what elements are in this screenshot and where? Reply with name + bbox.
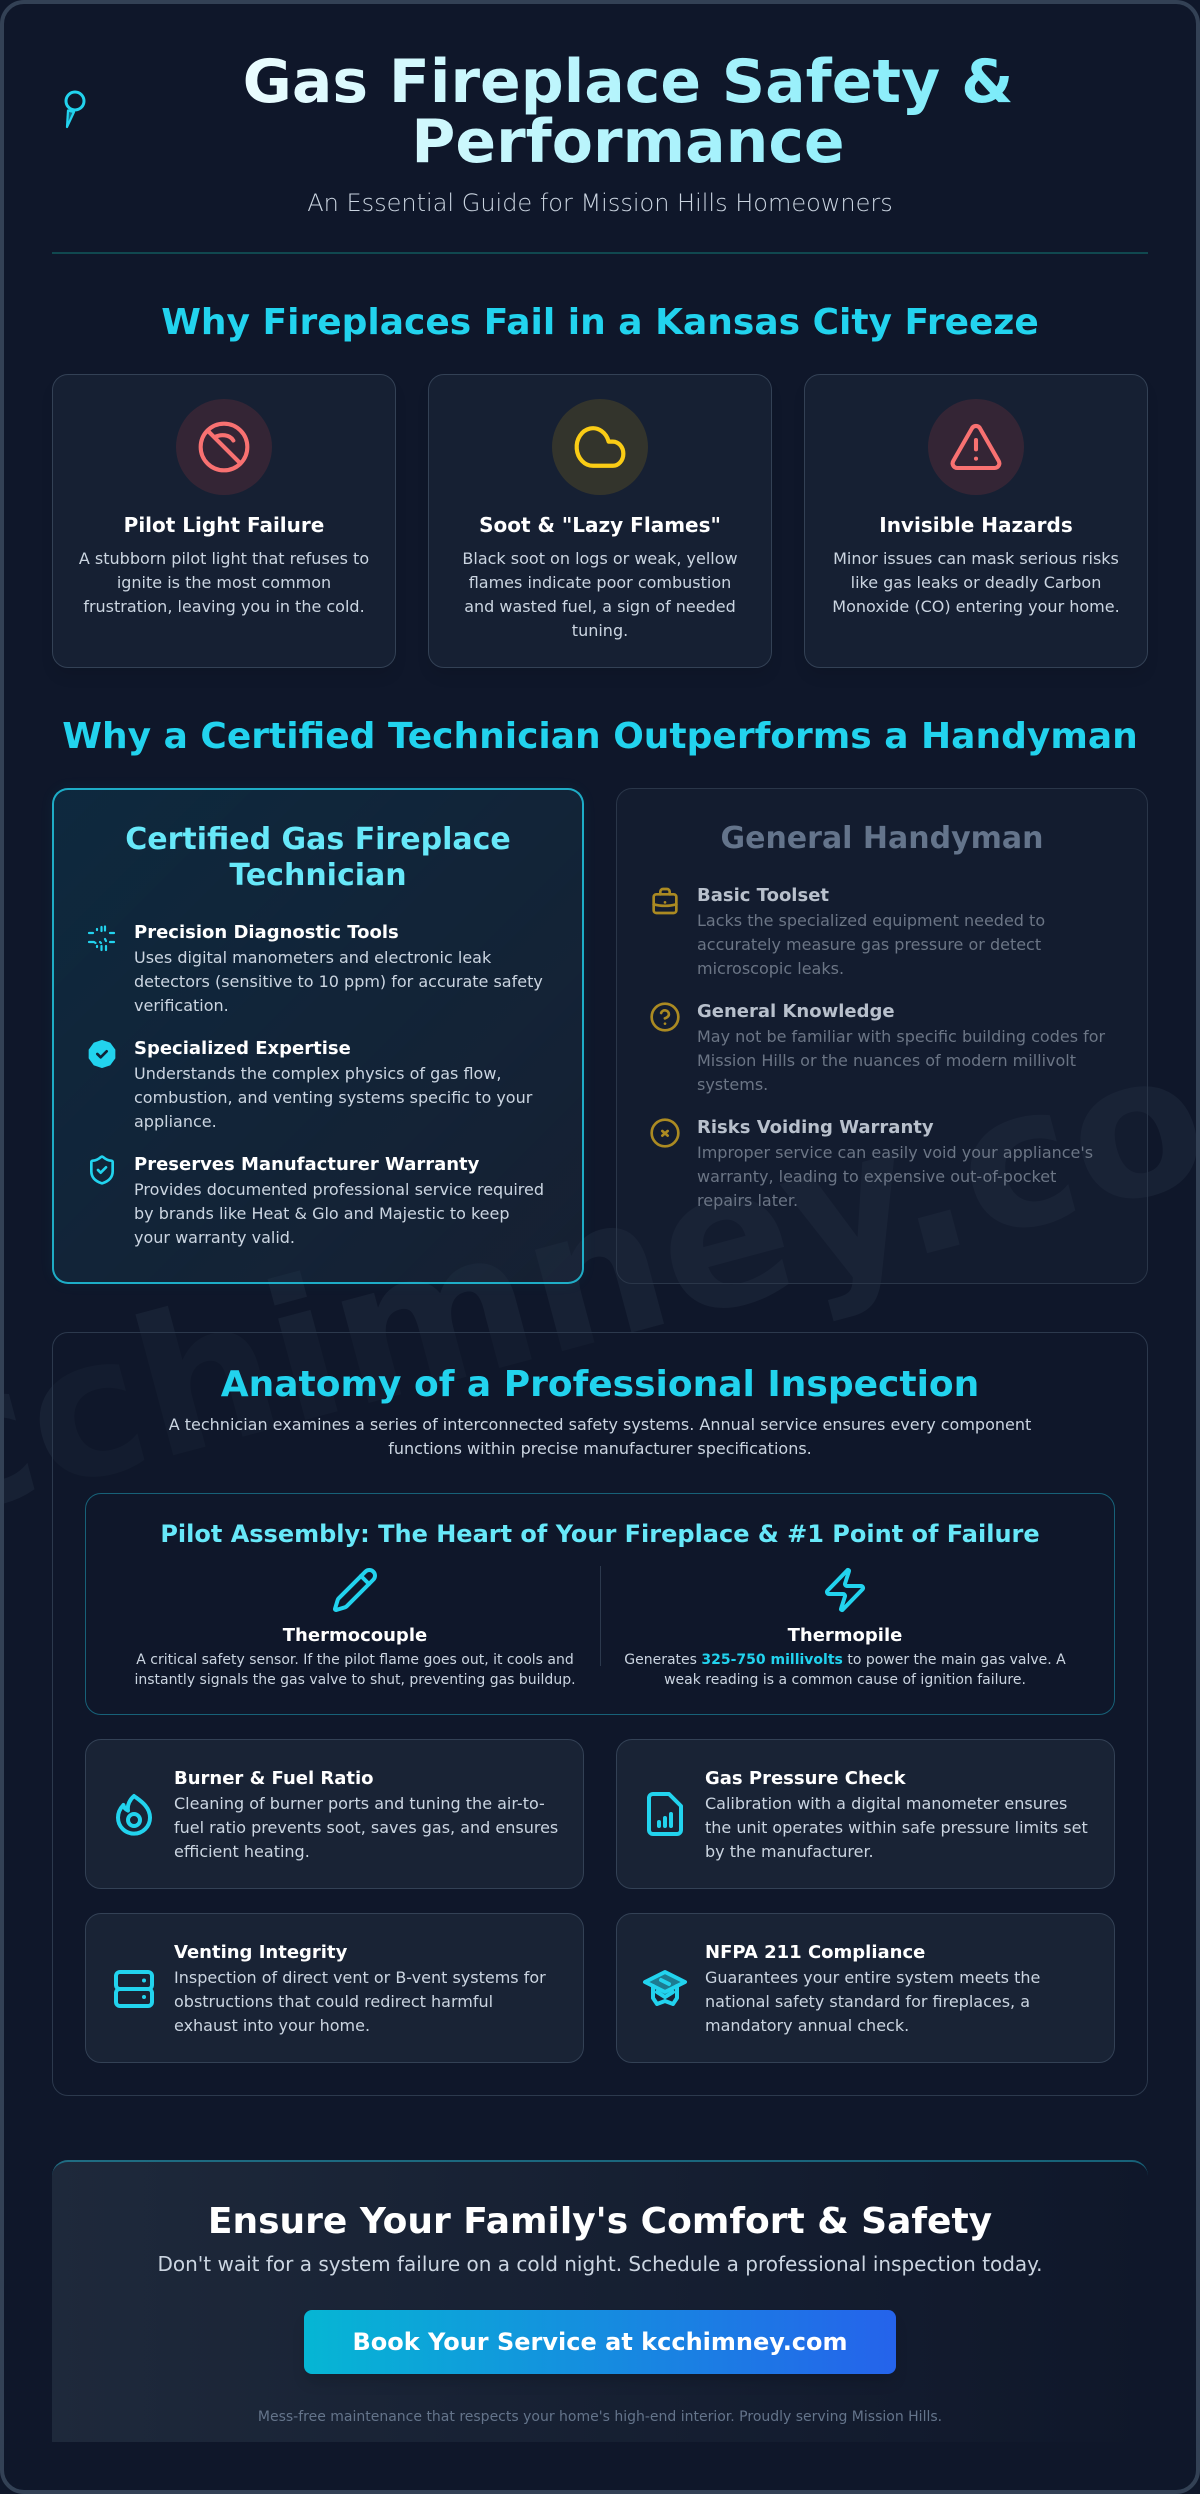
text: Calibration with a digital manometer ensures the unit operates within safe pressure limits set by the manufacturer. <box>705 1794 1088 1861</box>
panel: pilot light failure <box>52 374 396 668</box>
text: Don't wait for a system failure on a cold night. Schedule a professional inspection today. <box>157 2252 1043 2276</box>
icon: badge check <box>88 1040 116 1068</box>
text: A critical safety sensor. If the pilot flame goes out, it cools and <box>136 1652 574 1668</box>
heading: technician vs handyman: Why a Certified Technician Outperforms a Handyman <box>62 716 1138 757</box>
icon: diagnostic <box>88 925 116 952</box>
item: precision tools <box>88 922 543 1015</box>
panel: anatomy of inspection <box>52 1332 1148 2096</box>
text: Provides documented professional service required by brands like Heat & Glo and Majestic to keep your warranty valid. <box>134 1180 544 1247</box>
text: Generates 325-750 millivolts to power the main gas valve. A <box>624 1652 1066 1668</box>
heading: Certified Gas Fireplace Technician <box>125 822 511 893</box>
panel: invisible hazards <box>804 374 1148 668</box>
text: Minor issues can mask serious risks like gas leaks or deadly Carbon Monoxide (CO) entering your home. <box>832 549 1120 616</box>
heading: why fireplaces fail: Why Fireplaces Fail in a Kansas City Freeze <box>161 302 1039 343</box>
thermopile column <box>624 1568 1066 1688</box>
text: Risks Voiding Warranty <box>697 1117 934 1138</box>
card: venting integrity <box>85 1913 584 2063</box>
text: Precision Diagnostic Tools <box>134 922 399 943</box>
panel: soot and lazy flames <box>428 374 772 668</box>
icon: warning triangle <box>928 399 1024 495</box>
icon: pencil probe <box>333 1568 377 1612</box>
heading: General Handyman <box>720 821 1044 856</box>
text: Improper service can easily void your appliance's warranty, leading to expensive out-of-pocket repairs later. <box>697 1143 1093 1210</box>
text: Understands the complex physics of gas flow, combustion, and venting systems specific to your appliance. <box>134 1064 532 1131</box>
title <box>107 52 1149 172</box>
title: Gas Fireplace Safety & Performance <box>243 47 1013 177</box>
text: May not be familiar with specific building codes for Mission Hills or the nuances of modern millivolt systems. <box>697 1027 1105 1094</box>
text: Basic Toolset <box>697 885 829 906</box>
card: burner and fuel ratio <box>85 1739 584 1889</box>
heading: Pilot Light Failure <box>124 513 324 537</box>
icon: briefcase <box>652 888 678 914</box>
text: A stubborn pilot light that refuses to ignite is the most common frustration, leaving you in the cold. <box>79 549 369 616</box>
icon: shield check <box>90 1155 114 1185</box>
text: Black soot on logs or weak, yellow flames indicate poor combustion and wasted fuel, a sign of needed tuning. <box>462 549 738 640</box>
card: nfpa compliance <box>616 1913 1115 2063</box>
text: anatomy intro: A technician examines a series of interconnected safety systems. Annual service ensures every component functions within precise manufacturer specifications. <box>169 1415 1031 1458</box>
icon: x circle <box>650 1118 680 1148</box>
icon: question <box>650 1002 680 1032</box>
text: Burner & Fuel Ratio <box>174 1768 374 1789</box>
icon: graduation cap <box>642 1970 688 2006</box>
icon: vent stack <box>114 1970 154 2008</box>
text: instantly signals the gas valve to shut, preventing gas buildup. <box>134 1672 576 1688</box>
text: Specialized Expertise <box>134 1038 351 1059</box>
icon: flame <box>116 1794 152 1836</box>
button <box>304 2310 896 2374</box>
item: basic toolset <box>652 885 1045 978</box>
heading: Thermopile <box>788 1625 902 1646</box>
text: Uses digital manometers and electronic leak detectors (sensitive to 10 ppm) for accurate safety verification. <box>134 948 543 1015</box>
text: NFPA 211 Compliance <box>705 1942 925 1963</box>
call to action panel <box>52 2160 1148 2442</box>
icon: file chart <box>647 1792 683 1836</box>
text: Guarantees your entire system meets the national safety standard for fireplaces, a mandatory annual check. <box>705 1968 1040 2035</box>
text: General Knowledge <box>697 1001 895 1022</box>
heading: Ensure Your Family's Comfort & Safety <box>208 2201 992 2242</box>
heading: pilot assembly: Pilot Assembly: The Heart of Your Fireplace & #1 Point of Failure <box>160 1520 1040 1548</box>
heading: Soot & "Lazy Flames" <box>479 513 721 537</box>
card: gas pressure check <box>616 1739 1115 1889</box>
item: general knowledge <box>650 1001 1106 1094</box>
text: Venting Integrity <box>174 1942 347 1963</box>
item: warranty <box>90 1154 544 1247</box>
text: Lacks the specialized equipment needed to accurately measure gas pressure or detect microscopic leaks. <box>697 911 1045 978</box>
button: Book Your Service at kcchimney.com <box>352 2328 848 2356</box>
text: Preserves Manufacturer Warranty <box>134 1154 479 1175</box>
panel: general handyman <box>616 788 1148 1284</box>
item: risks voiding warranty <box>650 1117 1093 1210</box>
icon: cloud <box>552 399 648 495</box>
panel: certified technician <box>52 788 584 1284</box>
icon: bolt <box>824 1568 866 1612</box>
thermocouple column <box>134 1568 576 1688</box>
text: weak reading is a common cause of ignition failure. <box>664 1672 1026 1688</box>
heading: anatomy: Anatomy of a Professional Inspection <box>221 1364 979 1405</box>
header <box>64 47 1013 217</box>
panel: pilot assembly <box>85 1493 1115 1715</box>
text <box>134 1652 576 1688</box>
text: Cleaning of burner ports and tuning the air-to-fuel ratio prevents soot, saves gas, and ensures efficient heating. <box>174 1794 558 1861</box>
text: Gas Pressure Check <box>705 1768 906 1789</box>
subtitle: An Essential Guide for Mission Hills Homeowners <box>307 189 893 217</box>
heading: Thermocouple <box>283 1625 427 1646</box>
icon: no flame <box>176 399 272 495</box>
icon: flame key <box>64 90 86 128</box>
text <box>624 1652 1066 1688</box>
footer note: Mess-free maintenance that respects your home's high-end interior. Proudly serving Mission Hills. <box>258 2409 942 2425</box>
item: expertise <box>88 1038 532 1131</box>
text: Inspection of direct vent or B-vent systems for obstructions that could redirect harmful exhaust into your home. <box>174 1968 546 2035</box>
heading: Invisible Hazards <box>879 513 1073 537</box>
